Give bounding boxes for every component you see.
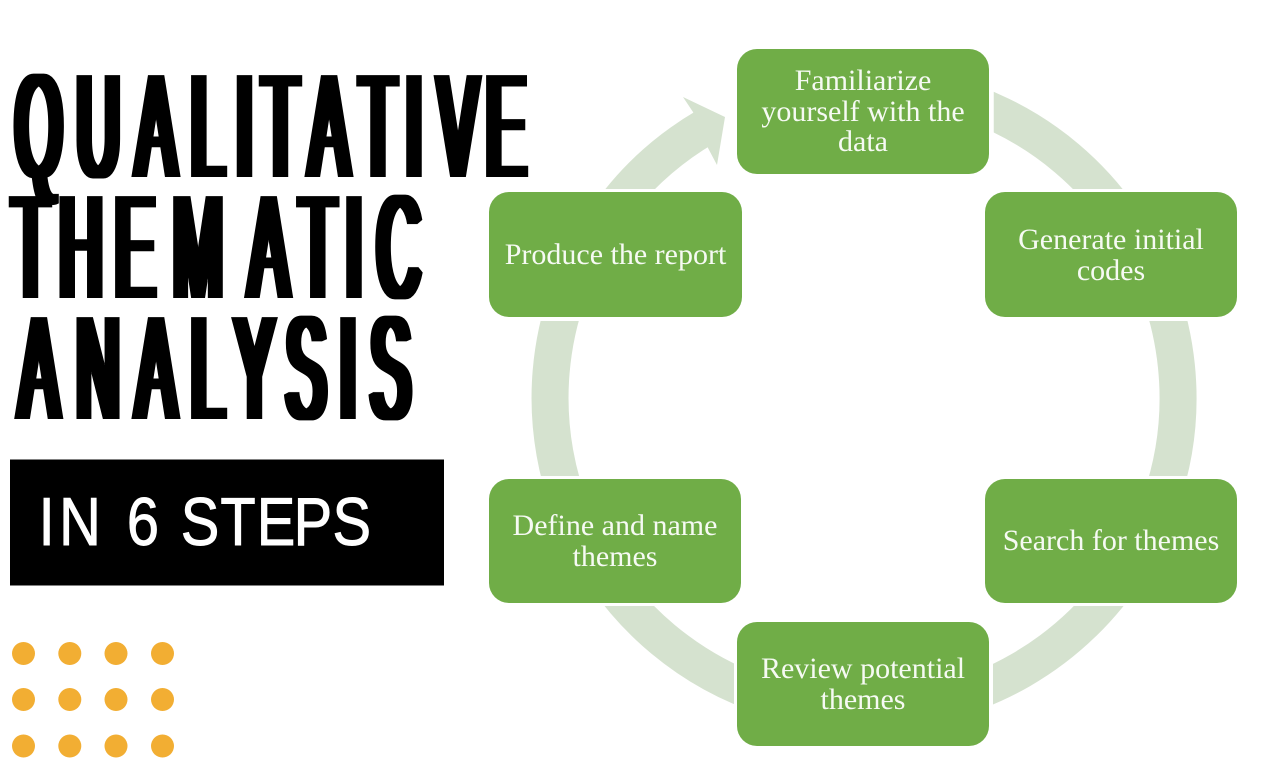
title: ANALYSIS — [19, 285, 410, 451]
step 6: produce report: Produce the report — [505, 238, 727, 271]
title: THEMATIC — [12, 164, 420, 330]
step 4: review themes — [734, 619, 993, 749]
dot grid decoration — [12, 642, 174, 758]
step 3: search themes: Search for themes — [1003, 524, 1219, 557]
step 6: produce report — [486, 189, 745, 321]
step 1: familiarize: Familiarize — [795, 64, 931, 97]
subtitle banner: IN 6 STEPS — [39, 485, 371, 560]
step 2: generate codes: Generate initial — [1018, 223, 1204, 256]
step 1: familiarize: data — [838, 125, 888, 158]
step 5: define themes — [486, 476, 744, 606]
step 4: review themes: themes — [821, 683, 905, 716]
step 4: review themes: Review potential — [761, 652, 965, 685]
subtitle banner — [10, 460, 444, 586]
step 2: generate codes — [982, 189, 1240, 321]
step 2: generate codes: codes — [1077, 254, 1145, 287]
step 1: familiarize: yourself with the — [761, 95, 965, 128]
step 5: define themes: Define and name — [513, 509, 717, 542]
arrow: circular cycle ring — [550, 84, 1178, 712]
title: QUALITATIVE — [16, 43, 526, 209]
title — [12, 43, 526, 451]
step 3: search themes — [982, 476, 1240, 606]
step 5: define themes: themes — [573, 540, 657, 573]
step 1: familiarize — [737, 49, 991, 174]
